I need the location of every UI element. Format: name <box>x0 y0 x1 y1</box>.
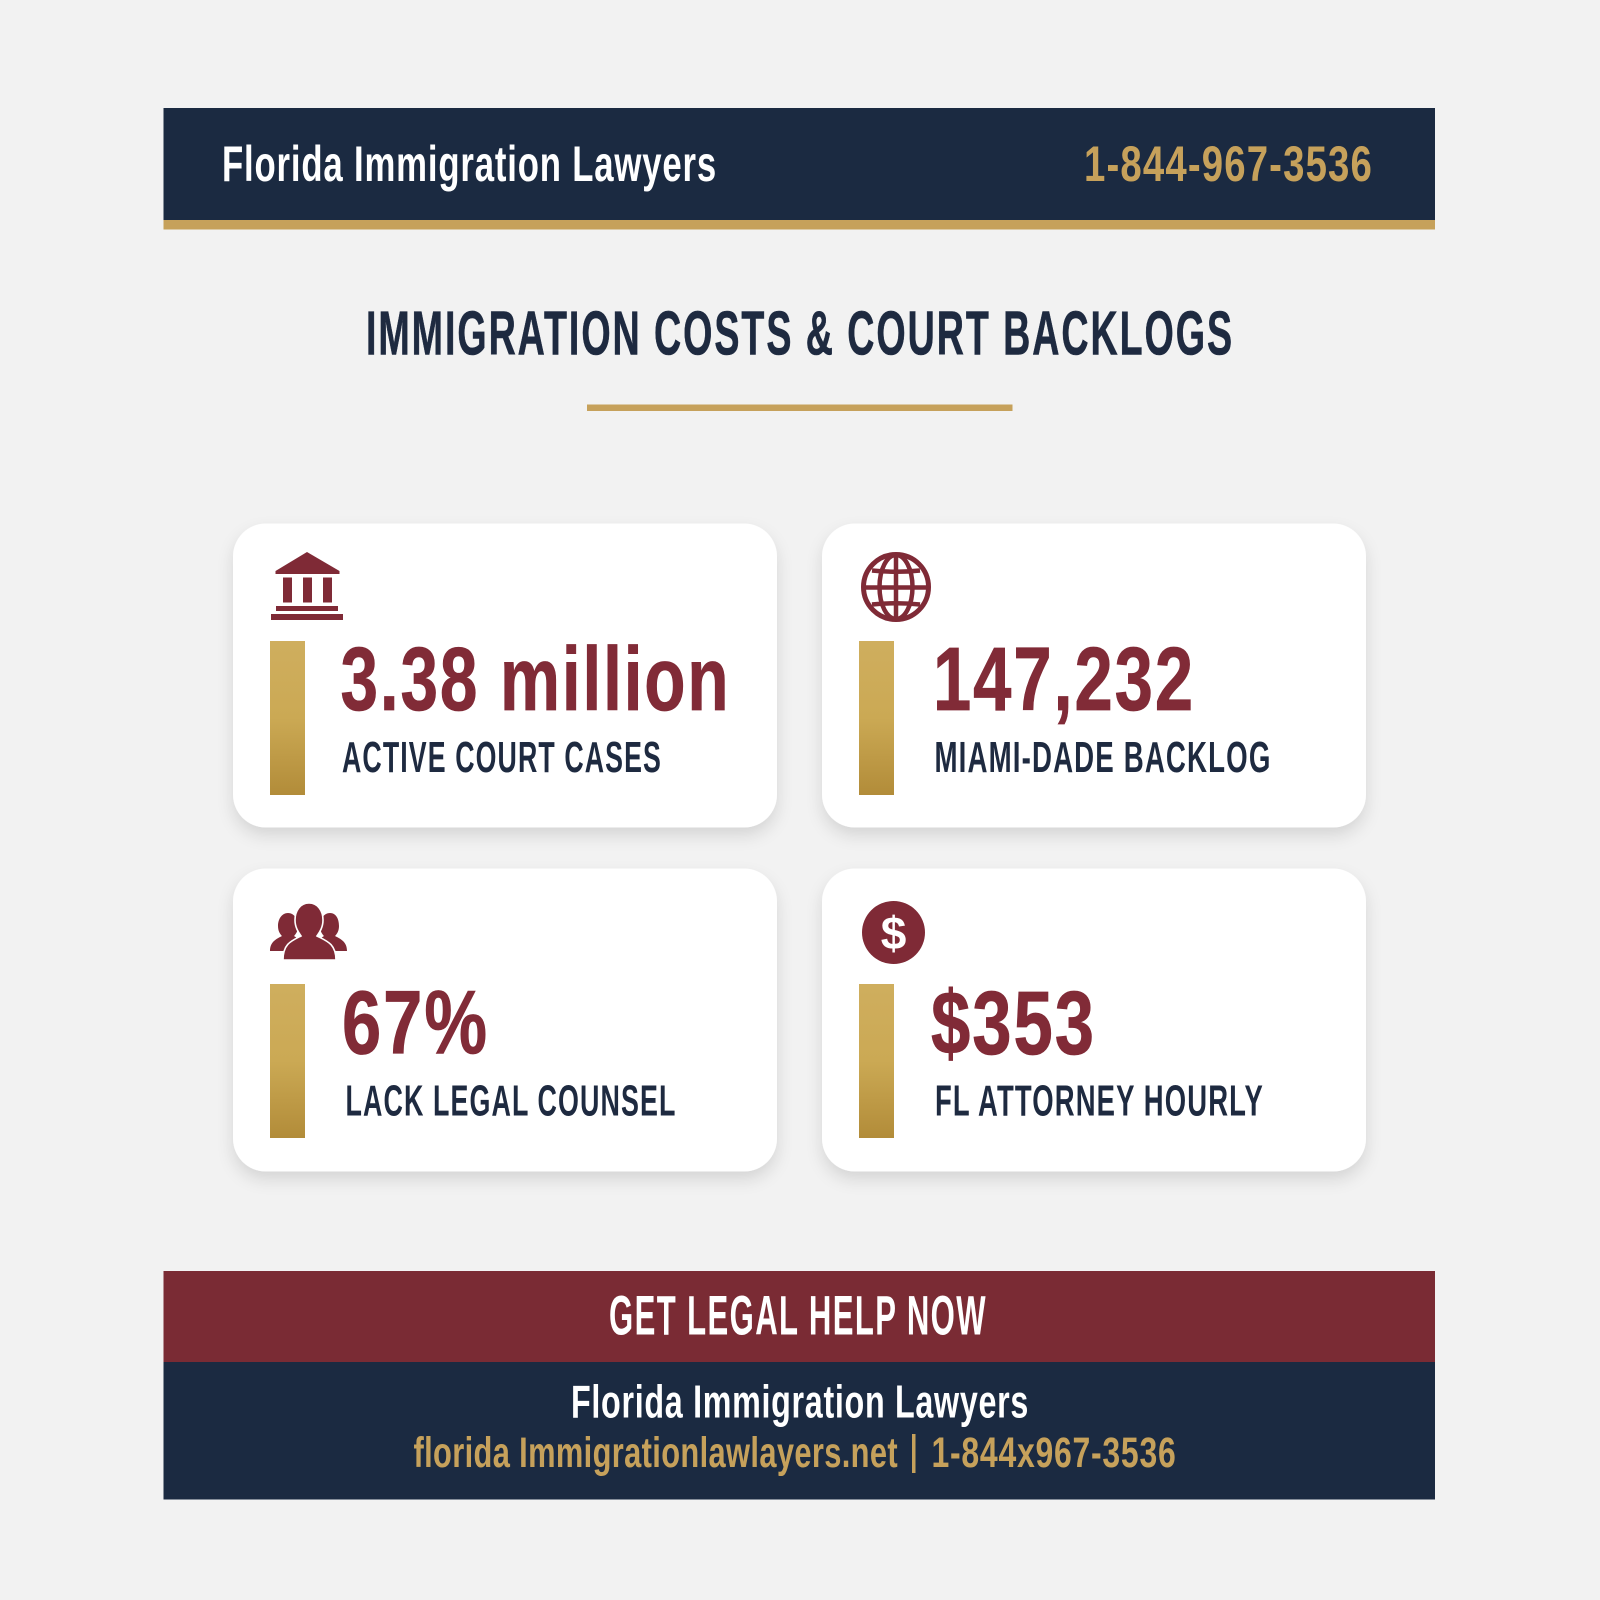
panel: active court cases <box>233 524 777 828</box>
stat label: FL ATTORNEY HOURLY <box>935 1076 1264 1126</box>
phone number: 1-844-967-3536 <box>1084 136 1373 192</box>
stat value: 3.38 million <box>340 630 730 730</box>
stat value: 147,232 <box>933 630 1195 730</box>
footer contact block <box>164 1362 1435 1500</box>
call to action banner <box>164 1271 1435 1362</box>
icon: dollar: $ <box>881 907 906 959</box>
stat label: MIAMI-DADE BACKLOG <box>934 733 1272 782</box>
stat value: $353 <box>931 974 1096 1074</box>
stat label: ACTIVE COURT CASES <box>342 733 662 782</box>
gold bar <box>859 984 894 1138</box>
cta heading: GET LEGAL HELP NOW <box>609 1284 987 1346</box>
icon: dollar <box>862 901 925 964</box>
gold bar <box>859 641 894 795</box>
panel: attorney hourly <box>822 868 1366 1172</box>
header bar <box>164 108 1435 230</box>
gold bar <box>270 641 305 795</box>
footer contact line: florida Immigrationlawlayers.net <box>414 1429 898 1477</box>
icon: globe <box>864 554 928 620</box>
icon: people <box>270 903 347 960</box>
firm name: Florida Immigration Lawyers <box>222 136 717 192</box>
panel: miami-dade backlog <box>822 524 1366 828</box>
gold bar <box>270 984 305 1138</box>
icon: courthouse <box>271 552 343 620</box>
footer firm name: Florida Immigration Lawyers <box>571 1376 1029 1428</box>
stat value: 67% <box>342 974 489 1074</box>
footer contact line: 1-844x967-3536 <box>932 1429 1176 1477</box>
panel: lack legal counsel <box>233 868 777 1172</box>
title underline <box>587 404 1012 411</box>
stat label: LACK LEGAL COUNSEL <box>346 1076 676 1126</box>
